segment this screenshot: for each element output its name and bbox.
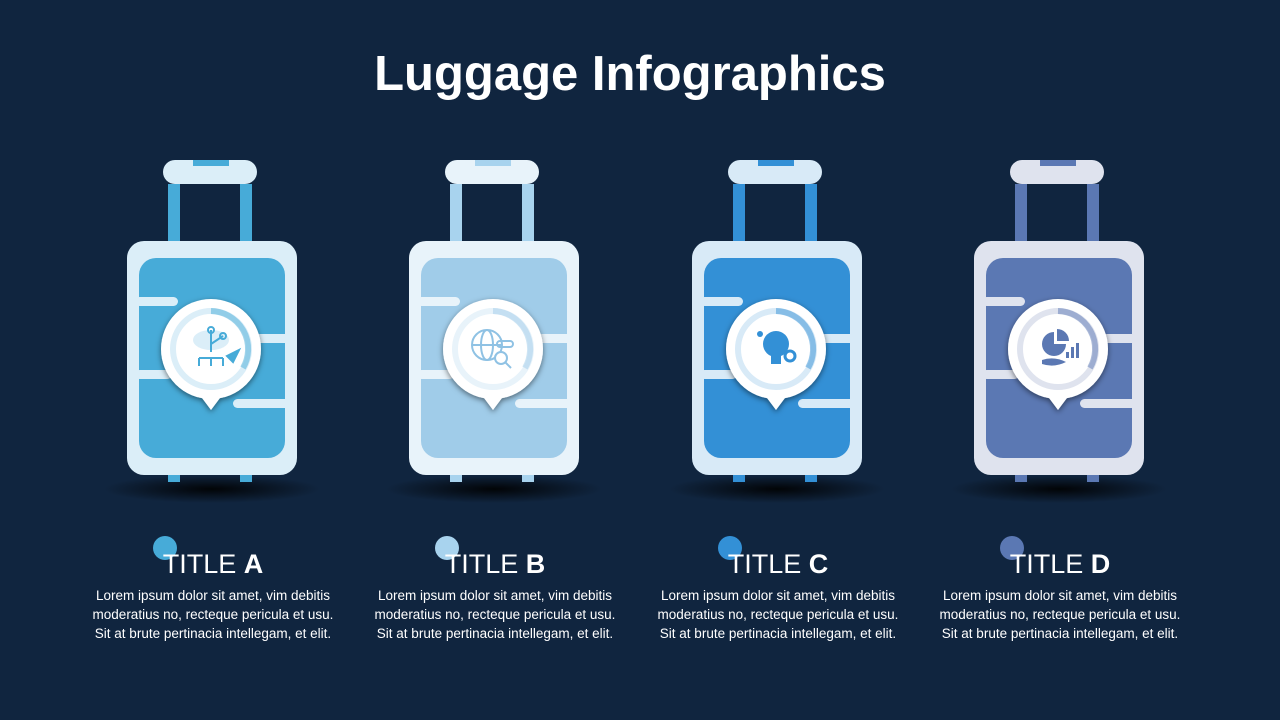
icon: globe search (472, 330, 513, 368)
luggage C (669, 160, 885, 503)
caption B (375, 536, 615, 641)
luggage A (104, 160, 320, 503)
caption C: TITLE C (728, 549, 828, 579)
caption C: Sit at brute pertinacia intellegam, et elit. (660, 626, 896, 641)
title: Luggage Infographics (374, 47, 886, 101)
caption B: moderatius no, recteque pericula et usu. (375, 607, 615, 622)
caption C: Lorem ipsum dolor sit amet, vim debitis (661, 588, 895, 603)
caption A: Sit at brute pertinacia intellegam, et elit. (95, 626, 331, 641)
caption B: TITLE B (445, 549, 545, 579)
caption D: Sit at brute pertinacia intellegam, et elit. (942, 626, 1178, 641)
caption C: moderatius no, recteque pericula et usu. (658, 607, 898, 622)
caption A: TITLE A (163, 549, 263, 579)
luggage D (951, 160, 1167, 503)
caption C (658, 536, 898, 641)
caption A: moderatius no, recteque pericula et usu. (93, 607, 333, 622)
caption D: moderatius no, recteque pericula et usu. (940, 607, 1180, 622)
icon: lightbulb gear (757, 331, 795, 364)
caption A: Lorem ipsum dolor sit amet, vim debitis (96, 588, 330, 603)
icon: pie chart (1042, 329, 1079, 366)
caption D: Lorem ipsum dolor sit amet, vim debitis (943, 588, 1177, 603)
caption B: Sit at brute pertinacia intellegam, et elit. (377, 626, 613, 641)
icon: network (193, 327, 239, 366)
luggage B (386, 160, 602, 503)
caption B: Lorem ipsum dolor sit amet, vim debitis (378, 588, 612, 603)
caption D: TITLE D (1010, 549, 1110, 579)
caption D (940, 536, 1180, 641)
caption A (93, 536, 333, 641)
